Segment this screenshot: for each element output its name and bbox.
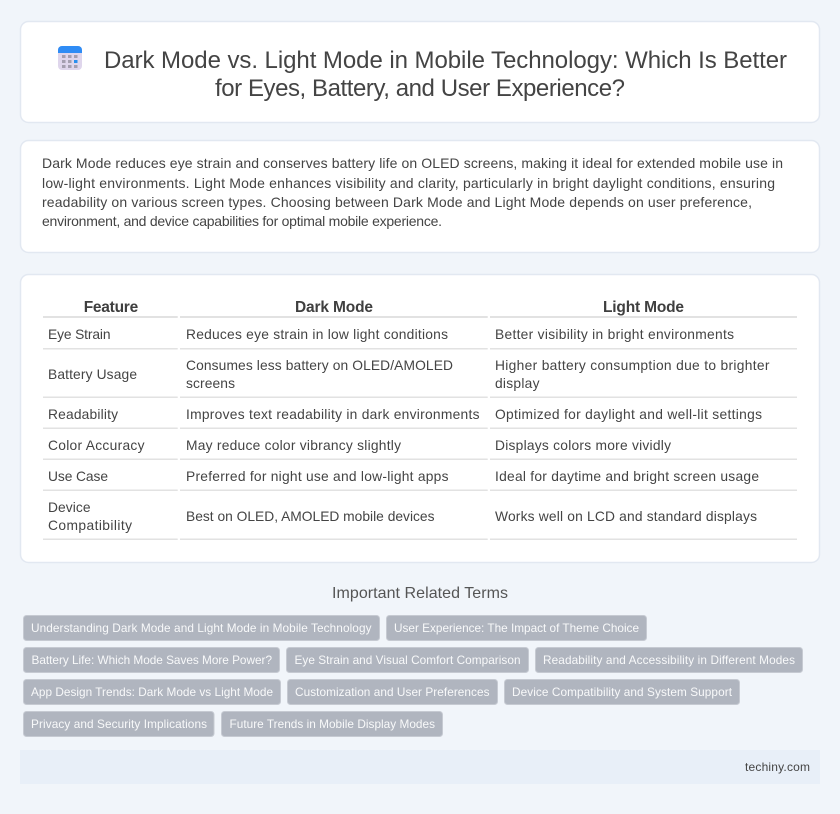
table header row: Feature [84,299,139,316]
text block: summary paragraph: low-light environments. Light Mode enhances visibility and clarity, particularly in bright daylight conditions, ensuring [42,175,775,191]
tag [386,616,646,640]
row: color accuracy: Color Accuracy [48,438,145,453]
tag: Privacy and Security Implications [31,717,207,731]
tag: Eye Strain and Visual Comfort Comparison [294,653,520,667]
tag [288,680,498,704]
panel: header [20,22,820,122]
row: battery usage: Consumes less battery on OLED/AMOLED [186,358,453,373]
tag: App Design Trends: Dark Mode vs Light Mode [31,685,273,699]
row: use case: Use Case [48,469,108,484]
row: use case: Preferred for night use and low-light apps [186,469,449,484]
panel: introduction [20,140,820,252]
row: color accuracy: May reduce color vibrancy slightly [186,438,401,453]
tag: Customization and User Preferences [295,685,490,699]
row: battery usage: screens [186,376,235,391]
tag [24,648,280,672]
table header row [84,299,684,316]
tag: Readability and Accessibility in Different Modes [543,653,795,667]
row: use case [48,469,759,484]
tag: Device Compatibility and System Support [512,685,733,699]
tag: Understanding Dark Mode and Light Mode in Mobile Technology [31,621,372,635]
tag group: related terms [24,616,802,736]
tag: Battery Life: Which Mode Saves More Power? [32,653,272,667]
row: eye strain: Eye Strain [48,327,110,342]
row: color accuracy: Displays colors more vividly [495,438,671,453]
tag [504,680,740,704]
heading: important related terms: Important Related Terms [332,585,508,602]
title [104,47,787,102]
tag [24,680,280,704]
footer [20,750,820,784]
row: battery usage: Higher battery consumption due to brighter [495,358,770,373]
row: color accuracy [48,438,671,453]
tag [24,616,380,640]
text block: summary paragraph [42,155,783,229]
table header row: Light Mode [603,299,684,316]
tag [222,712,442,736]
text block: summary paragraph: Dark Mode reduces eye strain and conserves battery life on OLED screens, making it ideal for extended mobile use in [42,155,783,171]
row: eye strain [48,327,734,342]
text block: summary paragraph: readability on various screen types. Choosing between Dark Mode and Light Mode depends on user preference, [42,194,752,210]
tag [24,712,214,736]
row: readability [48,407,762,422]
tag: User Experience: The Impact of Theme Choice [394,621,639,635]
row: readability: Readability [48,407,118,422]
row: readability: Improves text readability in dark environments [186,407,480,422]
row: battery usage [48,358,770,391]
table header row: Dark Mode [295,299,373,316]
row: device compatibility: Compatibility [48,518,132,533]
tag [536,648,802,672]
row: battery usage: display [495,376,540,391]
panel: comparison table [20,274,820,562]
title: Dark Mode vs. Light Mode in Mobile Technology: Which Is Better [104,47,787,74]
row: eye strain: Better visibility in bright environments [495,327,734,342]
row: device compatibility: Best on OLED, AMOLED mobile devices [186,509,435,524]
row: use case: Ideal for daytime and bright screen usage [495,469,759,484]
row: device compatibility: Device [48,500,91,515]
row: device compatibility: Works well on LCD and standard displays [495,509,757,524]
row: readability: Optimized for daylight and well-lit settings [495,407,762,422]
row: device compatibility [48,500,757,533]
title: for Eyes, Battery, and User Experience? [215,75,625,102]
tag: Future Trends in Mobile Display Modes [230,717,435,731]
text block: summary paragraph: environment, and device capabilities for optimal mobile experience. [42,213,442,229]
footer site name: techiny.com [745,760,810,774]
icon: calendar grid [58,46,82,70]
tag [286,648,528,672]
row: eye strain: Reduces eye strain in low light conditions [186,327,448,342]
row: battery usage: Battery Usage [48,367,137,382]
